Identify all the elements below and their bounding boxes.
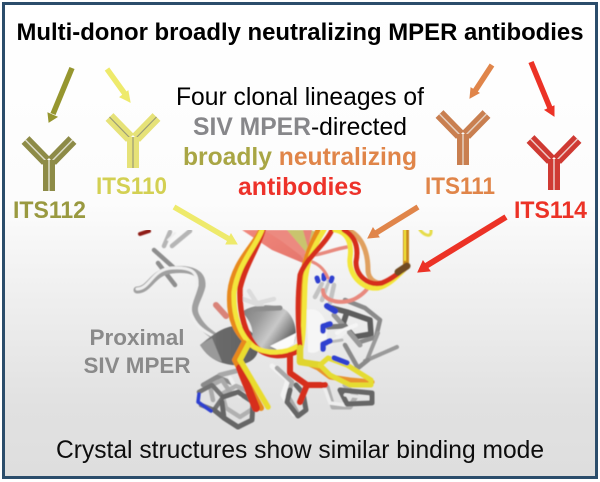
arrow: ITS111 to structure: [368, 207, 418, 238]
caption: Crystal structures show similar binding mode: [56, 436, 544, 464]
central description: Four clonal lineages of: [176, 83, 424, 111]
arrow: ITS114 to structure: [418, 217, 506, 272]
central description: [176, 83, 424, 201]
label: Proximal SIV MPER: SIV MPER: [84, 353, 191, 378]
salmon thin loops: [303, 247, 372, 302]
label: ITS112: ITS112: [13, 197, 86, 224]
antibody backbone ribbons: [230, 230, 431, 356]
grey amino acid sticks: [199, 282, 397, 427]
blue nitrogen tips: [198, 275, 347, 411]
central description: antibodies: [238, 173, 362, 201]
left coloured side chains: [235, 343, 268, 408]
arrow: to ITS110: [107, 69, 130, 102]
label: Proximal SIV MPER: [84, 325, 191, 378]
antibody icon: ITS112: [26, 140, 72, 191]
label: Proximal SIV MPER: Proximal: [90, 325, 184, 350]
grey helix: [200, 291, 327, 365]
arrow: to ITS114: [531, 62, 554, 116]
right coloured side chains: [290, 348, 372, 402]
central description: broadly neutralizing: [183, 143, 417, 171]
arrow: ITS110 to structure: [174, 207, 237, 244]
label: ITS114: ITS114: [514, 197, 588, 224]
salmon sheet: [242, 230, 304, 263]
antibody icon: ITS111: [440, 114, 486, 165]
antibody icon: ITS110: [110, 117, 156, 168]
title: Multi-donor broadly neutralizing MPER antibodies: [16, 19, 584, 46]
grey ribbon loops: [137, 231, 217, 338]
crystal structure overlay: [137, 230, 431, 427]
label: ITS110: ITS110: [96, 173, 167, 200]
arrow: to ITS111: [470, 65, 492, 98]
label: ITS111: ITS111: [425, 173, 495, 200]
arrow: to ITS112: [48, 68, 72, 122]
antibody icon: ITS114: [530, 139, 578, 190]
central description: SIV MPER-directed: [193, 113, 407, 141]
